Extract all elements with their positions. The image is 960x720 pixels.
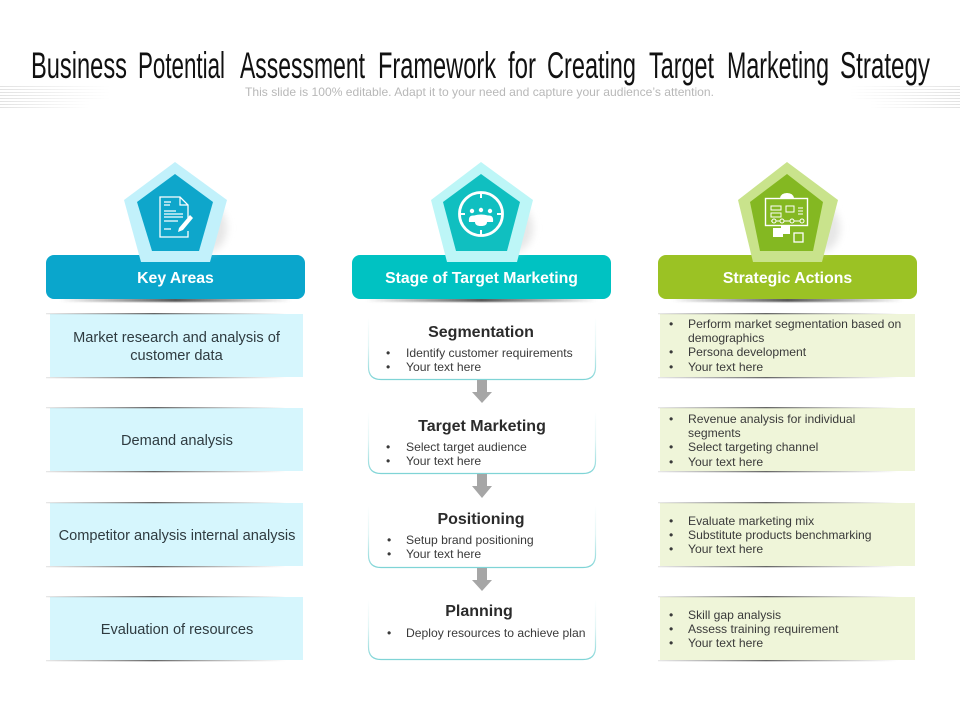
decorative stripes <box>0 86 960 108</box>
card: target marketing: Select target audience <box>406 440 527 454</box>
column: strategic actions <box>658 162 917 661</box>
box: market segmentation actions: • <box>669 345 673 359</box>
card: segmentation: Identify customer requirements <box>406 346 573 360</box>
arrow: target marketing to positioning <box>472 474 492 498</box>
title: Business <box>31 45 127 86</box>
title: for <box>508 45 536 86</box>
card: segmentation: • <box>386 360 390 374</box>
card: positioning <box>368 506 596 568</box>
card: planning <box>368 600 596 660</box>
header bar: key areas <box>46 255 305 302</box>
column: key areas <box>46 162 305 661</box>
title <box>31 45 930 86</box>
header bar: key areas: Key Areas <box>137 270 214 287</box>
box: skill gap actions: • <box>669 622 673 636</box>
title: Framework <box>378 45 496 86</box>
box: market segmentation actions: Perform market segmentation based on <box>688 317 901 331</box>
card: segmentation: Your text here <box>406 360 481 374</box>
card: positioning: • <box>387 547 391 561</box>
box: market segmentation actions: Your text here <box>688 360 763 374</box>
subtitle: This slide is 100% editable. Adapt it to your need and capture your audience’s attention. <box>245 85 714 99</box>
title: Potential <box>138 45 225 86</box>
box: market research: Market research and analysis of <box>73 330 281 346</box>
card: positioning: Your text here <box>406 547 481 561</box>
box: evaluation of resources <box>46 596 303 661</box>
title: Marketing <box>727 45 829 86</box>
card: segmentation <box>368 318 596 380</box>
box: revenue analysis actions: • <box>669 412 673 426</box>
header bar: stage of target marketing <box>352 255 611 302</box>
card: target marketing <box>368 412 596 474</box>
box: skill gap actions: • <box>669 608 673 622</box>
box: marketing mix actions: Substitute products benchmarking <box>688 528 872 542</box>
box: skill gap actions: • <box>669 636 673 650</box>
box: demand analysis: Demand analysis <box>121 433 233 449</box>
box: market segmentation actions <box>658 313 915 378</box>
box: market segmentation actions: demographics <box>688 331 764 345</box>
box: marketing mix actions: Your text here <box>688 542 763 556</box>
card: positioning: Positioning <box>437 511 525 528</box>
card: segmentation: • <box>386 346 390 360</box>
arrow: segmentation to target marketing <box>472 380 492 403</box>
box: marketing mix actions: Evaluate marketing mix <box>688 514 814 528</box>
card: positioning: Setup brand positioning <box>406 533 534 547</box>
box: skill gap actions: Your text here <box>688 636 763 650</box>
box: market research <box>46 313 303 378</box>
arrow: positioning to planning <box>472 568 492 591</box>
pentagon icon: document with pencil <box>124 162 227 262</box>
card: planning: • <box>387 626 391 640</box>
box: revenue analysis actions: • <box>669 455 673 469</box>
box: marketing mix actions: • <box>669 528 673 542</box>
card: target marketing: • <box>386 440 390 454</box>
card: segmentation: Segmentation <box>428 324 534 341</box>
box: marketing mix actions: • <box>669 514 673 528</box>
box: revenue analysis actions: Revenue analysis for individual <box>688 412 855 426</box>
column: stage of target marketing <box>352 162 611 660</box>
box: revenue analysis actions: segments <box>688 426 741 440</box>
box: revenue analysis actions: • <box>669 440 673 454</box>
box: market segmentation actions: Persona development <box>688 345 807 359</box>
box: demand analysis <box>46 407 303 472</box>
box: marketing mix actions: • <box>669 542 673 556</box>
card: positioning: • <box>387 533 391 547</box>
card: target marketing: Target Marketing <box>418 418 546 435</box>
box: market segmentation actions: • <box>669 317 673 331</box>
box: competitor analysis <box>46 502 303 567</box>
card: target marketing: Your text here <box>406 454 481 468</box>
box: skill gap actions <box>658 596 915 661</box>
box: market research: customer data <box>130 348 224 364</box>
card: target marketing: • <box>386 454 390 468</box>
header bar: strategic actions <box>658 255 917 302</box>
card: planning: Planning <box>445 603 513 620</box>
box: marketing mix actions <box>658 502 915 567</box>
box: evaluation of resources: Evaluation of resources <box>101 622 253 638</box>
box: revenue analysis actions <box>658 407 915 472</box>
box: market segmentation actions: • <box>669 360 673 374</box>
title: Target <box>649 45 714 86</box>
pentagon icon: strategy board <box>738 162 840 262</box>
header bar: strategic actions: Strategic Actions <box>723 270 852 287</box>
header bar: stage of target marketing: Stage of Target Marketing <box>385 270 578 287</box>
title: Creating <box>547 45 636 86</box>
title: Assessment <box>240 45 365 86</box>
card: planning: Deploy resources to achieve plan <box>406 626 586 640</box>
box: competitor analysis: Competitor analysis internal analysis <box>59 528 295 544</box>
box: skill gap actions: Skill gap analysis <box>688 608 781 622</box>
box: revenue analysis actions: Select targeting channel <box>688 440 818 454</box>
pentagon icon: target with people <box>431 162 533 262</box>
box: skill gap actions: Assess training requirement <box>688 622 839 636</box>
box: revenue analysis actions: Your text here <box>688 455 763 469</box>
